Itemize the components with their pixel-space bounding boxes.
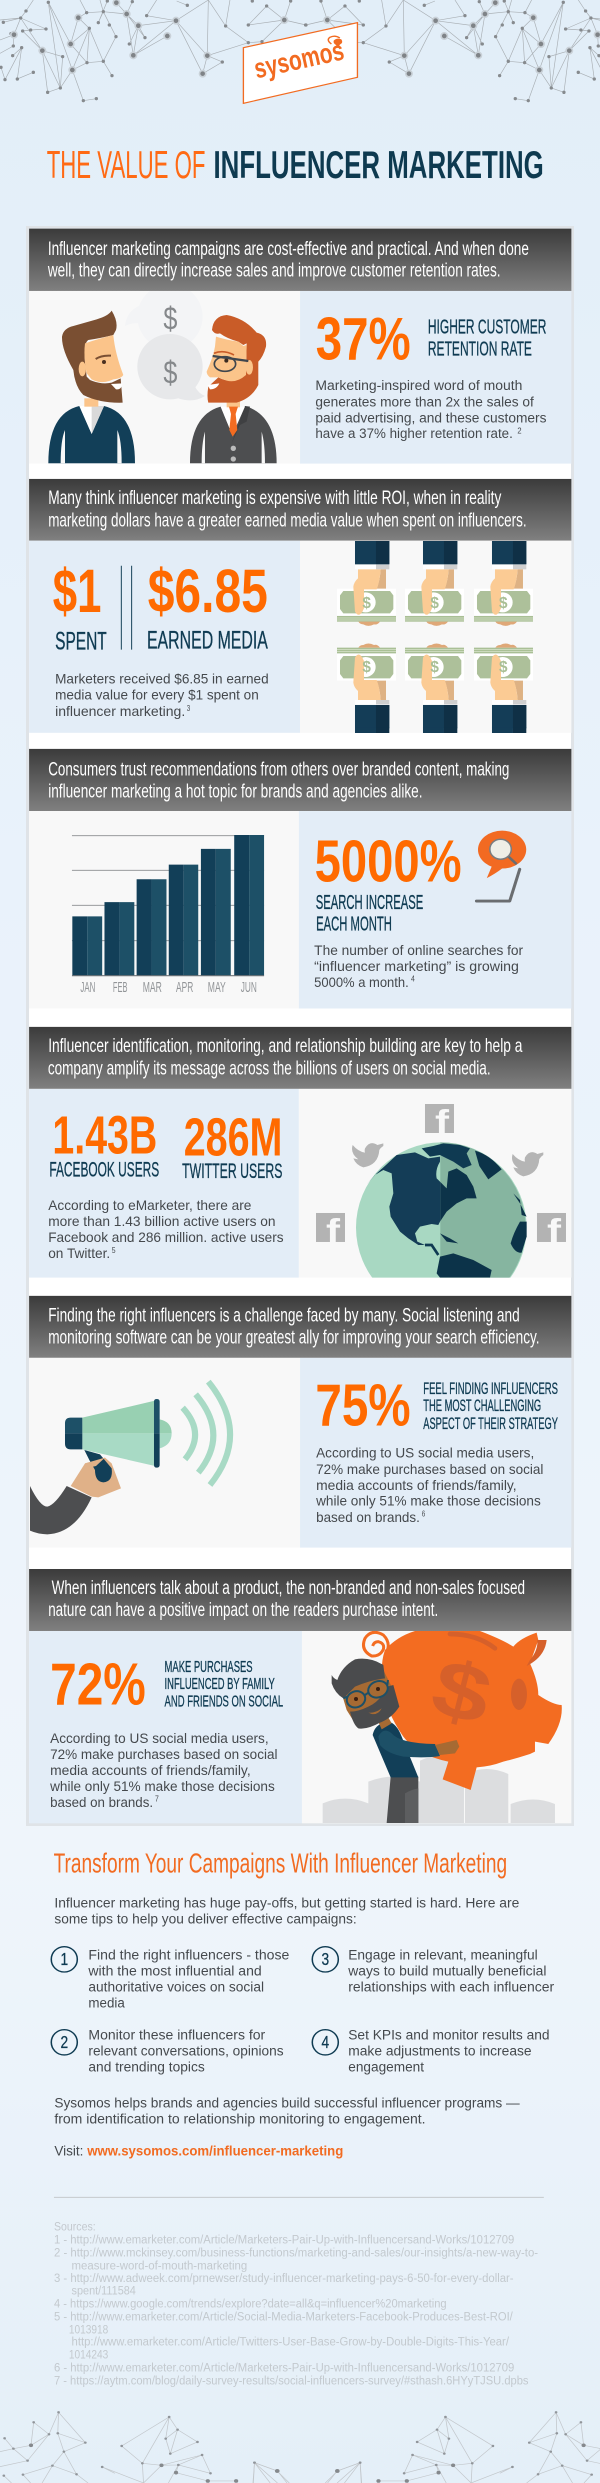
illustration: six hands exchanging money: $ [362,659,371,676]
stat: 72% make purchases influenced by family and friends [50,1650,283,1717]
sources list: 6 - http://www.emarketer.com/Article/Marketers-Pair-Up-with-Influencersand-Works/1012709 [54,2361,514,2374]
sources list: Sources: [54,2220,96,2233]
panel: finding influencers [29,1296,571,1548]
section: transform your campaigns [51,1849,554,2159]
intro text [54,1896,519,1927]
stat: 5000% search increase: EACH MONTH [316,913,392,935]
sources list: spent/111584 [72,2284,136,2297]
closing text: Sysomos helps brands and agencies build successful influencer programs — [54,2096,521,2111]
illustration: six hands exchanging money: $ [430,659,439,676]
body text: based on brands. [50,1796,153,1811]
tip 1: authoritative voices on social [88,1980,264,1995]
body text: media accounts of friends/family, [50,1764,251,1779]
body text: Marketing-inspired word of mouth [315,379,522,394]
closing text: from identification to relationship monitoring to engagement. [54,2112,426,2127]
sources list: measure-word-of-mouth-marketing [72,2259,247,2272]
section header 2 [29,479,571,541]
stat: $6.85 earned media [147,557,268,654]
illustration: six hands exchanging money: $ [499,595,508,612]
tip 2: relevant conversations, opinions [88,2044,284,2059]
illustration: two bearded men with dollar speech bubbles [48,306,277,464]
body text: 6 [422,1509,425,1519]
body text: have a 37% higher retention rate. [315,427,513,442]
tip 1: 1 [60,1949,68,1969]
body text: According to US social media users, [316,1446,534,1461]
stat: $6.85 earned media: EARNED MEDIA [147,627,268,654]
body text: generates more than 2x the sales of [315,395,535,410]
body text: while only 51% make those decisions [49,1780,275,1795]
section header 3: influencer marketing a hot topic for brands and agencies alike. [48,781,423,802]
stat: 72% make purchases influenced by family and friends: INFLUENCED BY FAMILY [165,1675,275,1693]
sources list [54,2197,544,2387]
illustration: globe with social icons: f [435,1104,450,1141]
body text: 5000% a month. [314,975,409,990]
tip 4: engagement [348,2060,425,2075]
body text: media value for every $1 spent on [55,687,259,703]
tip 4 [312,2028,550,2075]
tip 4: Set KPIs and monitor results and [348,2028,550,2043]
section header 1 [29,229,571,291]
tip 2 [51,2028,284,2075]
sources list: 1014243 [69,2348,108,2361]
body text: influencer marketing. [55,703,185,719]
body text: more than 1.43 billion active users on [48,1215,276,1230]
section header 3 [29,749,571,811]
body text: “influencer marketing” is growing [314,958,519,974]
stat: 72% make purchases influenced by family and friends: AND FRIENDS ON SOCIAL [165,1693,283,1710]
stat: 286M twitter users: TWITTER USERS [182,1159,282,1183]
body text: Facebook and 286 million. active users [48,1231,284,1246]
network pattern: top [0,0,600,101]
main panel frame [28,228,572,1824]
body text: on Twitter. [48,1247,110,1262]
body text [48,1199,284,1262]
illustration: two bearded men with dollar speech bubbles: $ [163,300,177,336]
sources list: 1013918 [69,2323,108,2336]
body text: 72% make purchases based on social [316,1463,543,1478]
stat: 72% make purchases influenced by family and friends: 72% [50,1650,146,1717]
body text: 5 [112,1246,116,1255]
body text [314,942,523,990]
stat: 37% higher customer retention rate: 37% [316,305,411,372]
bar chart: monthly searches: APR [176,980,193,996]
title [47,144,544,187]
illustration: globe with social icons: f [326,1213,341,1250]
body text: paid advertising, and these customers [315,411,546,426]
body text: 2 [517,426,522,435]
panel: purchase intent [29,1569,571,1823]
stat: 72% make purchases influenced by family and friends: MAKE PURCHASES [165,1658,253,1676]
sources list: 4 - https://www.google.com/trends/explore?date=all&q=influencer%20marketing [54,2297,447,2310]
bar chart: monthly searches [72,835,264,996]
stat: 5000% search increase: SEARCH INCREASE [316,892,423,914]
sources list: 3 - http://www.adweek.com/prnewser/study-influencer-marketing-pays-6-50-for-every-dollar- [54,2272,514,2285]
illustration: globe with social icons: f [547,1213,562,1250]
illustration: six hands exchanging money: $ [362,595,371,612]
stat: 1.43B facebook users: FACEBOOK USERS [49,1158,159,1181]
body text: The number of online searches for [314,942,523,958]
logo: sysomos [243,23,357,103]
section header 5 [29,1296,571,1358]
body text: Marketers received $6.85 in earned [55,671,269,686]
intro text: some tips to help you deliver effective campaigns: [54,1912,357,1927]
body text [49,1732,277,1811]
panel: earned media [29,479,571,733]
section header 6 [29,1569,571,1631]
visit link: www.sysomos.com/influencer-marketing [86,2144,343,2159]
logo: sysomos: sysomos [251,35,347,84]
tip 1: with the most influential and [87,1964,262,1979]
stat: $1 spent: SPENT [55,628,107,655]
icon: magnifier speech bubble [476,831,526,901]
illustration: man carrying piggy bank over coins [323,1631,562,1823]
visit link: Visit: [54,2144,83,2159]
stat: 75% feel finding influencers most challenging: 75% [315,1372,411,1439]
tip 2: 2 [60,2032,68,2052]
body text: 3 [187,704,191,713]
network pattern: bottom [0,2412,600,2483]
stat: $1 spent [53,557,107,655]
tip 3: ways to build mutually beneficial [347,1964,546,1979]
body text: According to US social media users, [50,1732,269,1747]
section header 4 [29,1027,571,1089]
illustration: six hands exchanging money: $ [499,659,508,676]
tip 4: 4 [321,2032,329,2052]
tip 2: Monitor these influencers for [88,2028,265,2043]
panel: customer retention [29,229,571,464]
tip 1: media [88,1996,125,2011]
stat: 5000% search increase [315,828,462,935]
tip 1 [51,1947,289,2011]
stat: $6.85 earned media: $6.85 [148,557,268,626]
title: THE VALUE OF [47,144,206,187]
panel: social media users [29,1027,571,1278]
illustration: six hands exchanging money: $ [430,595,439,612]
bar chart: monthly searches: MAY [208,980,226,996]
bar chart: monthly searches: MAR [143,980,162,996]
body text: 7 [155,1794,159,1803]
panel: search increase [29,749,571,1009]
tip 4: make adjustments to increase [348,2044,532,2059]
stat: $1 spent: $1 [53,557,101,626]
tip 3: 3 [321,1949,329,1969]
tip 3: relationships with each influencer [348,1980,554,1995]
body text: 4 [411,975,415,984]
body text [55,671,269,719]
body text: 72% make purchases based on social [50,1748,277,1763]
illustration: globe with social icons [316,1104,566,1278]
body text: based on brands. [316,1510,420,1526]
bar chart: monthly searches: JAN [80,980,95,996]
body text: while only 51% make those decisions [315,1494,541,1509]
illustration: six hands exchanging money [337,541,533,733]
stat: 286M twitter users [182,1107,282,1183]
body text [315,1446,543,1526]
stat: 286M twitter users: 286M [184,1107,282,1168]
stat: 37% higher customer retention rate [316,305,546,372]
bar chart: monthly searches: FEB [113,980,127,996]
tip 1: Find the right influencers - those [88,1948,289,1963]
illustration: hand holding megaphone [30,1382,230,1534]
illustration: man carrying piggy bank over coins: $ [423,1642,500,1742]
sources list: 5 - http://www.emarketer.com/Article/Social-Media-Marketers-Facebook-Produces-Best-ROI/ [54,2310,513,2323]
body text: According to eMarketer, there are [48,1199,251,1214]
tip 2: and trending topics [88,2060,205,2075]
illustration: two bearded men with dollar speech bubbles: $ [163,354,177,390]
closing text [54,2096,521,2127]
stat: 1.43B facebook users: 1.43B [52,1105,157,1166]
stat: 1.43B facebook users [49,1105,159,1181]
bar chart: monthly searches: JUN [241,980,257,996]
tip 3: Engage in relevant, meaningful [348,1948,538,1963]
stat: 75% feel finding influencers most challenging [315,1372,558,1439]
body text: media accounts of friends/family, [316,1479,517,1494]
tip 3 [312,1947,554,1995]
body text [315,379,546,442]
sources list: http://www.emarketer.com/Article/Twitters-User-Base-Grow-by-Double-Digits-This-Year/ [72,2335,509,2348]
intro text: Influencer marketing has huge pay-offs, but getting started is hard. Here are [54,1896,519,1911]
stat: 5000% search increase: 5000% [315,828,462,895]
sources list: 1 - http://www.emarketer.com/Article/Marketers-Pair-Up-with-Influencersand-Works/1012709 [54,2233,514,2246]
